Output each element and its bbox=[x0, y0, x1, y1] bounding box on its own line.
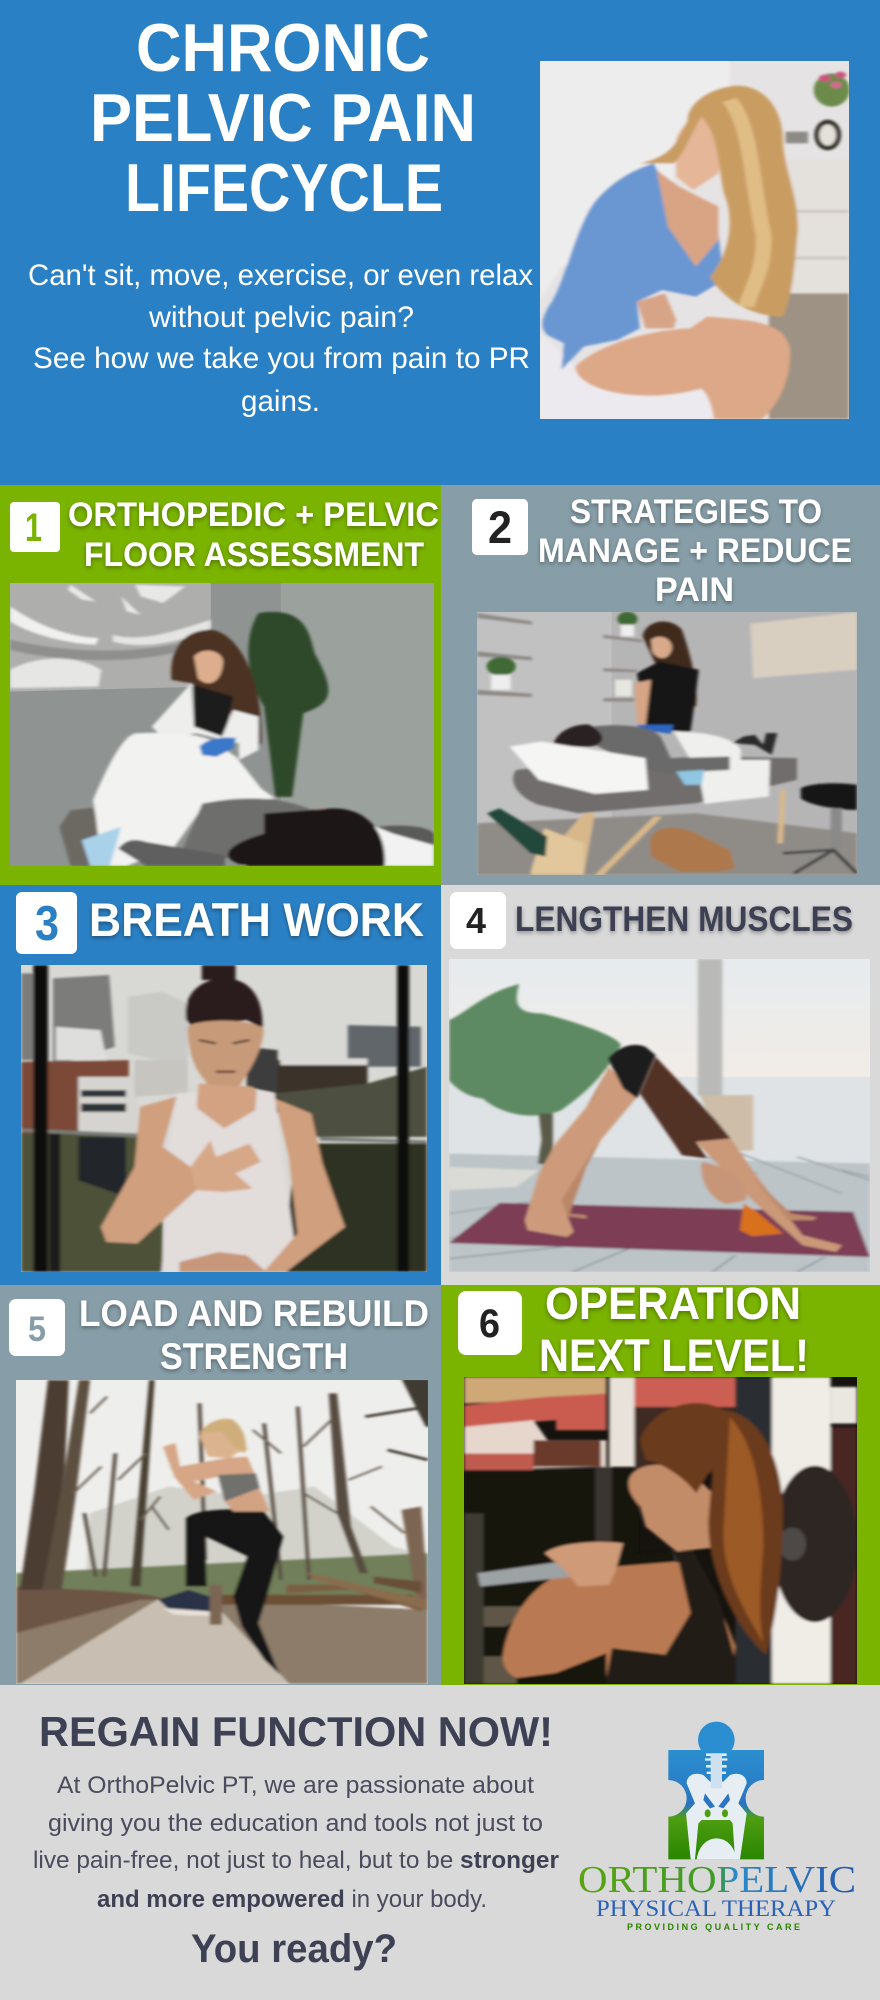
heading 5 bbox=[79, 1293, 429, 1377]
intro text: Can't sit, move, exercise, or even relax bbox=[28, 259, 533, 292]
title: CHRONIC bbox=[136, 10, 430, 86]
heading: regain function: REGAIN FUNCTION NOW! bbox=[39, 1708, 553, 1755]
number badge 3 bbox=[16, 892, 77, 954]
title bbox=[90, 10, 476, 226]
heading 5: STRENGTH bbox=[160, 1336, 348, 1377]
logo: OrthoPelvic Physical Therapy: PROVIDING QUALITY CARE bbox=[627, 1922, 800, 1932]
photo: barbell lift bbox=[464, 1377, 857, 1684]
panel: step 5 bbox=[0, 1285, 441, 1685]
panel: step 3 bbox=[0, 885, 441, 1285]
panel: step 4 bbox=[441, 885, 880, 1285]
body text bbox=[33, 1772, 559, 1913]
intro text: without pelvic pain? bbox=[148, 301, 414, 334]
photo: woman with pelvic pain bbox=[540, 61, 849, 419]
title: LIFECYCLE bbox=[125, 150, 443, 226]
number badge 4: 4 bbox=[466, 900, 486, 941]
heading 4: LENGTHEN MUSCLES bbox=[515, 900, 853, 939]
heading 5: LOAD AND REBUILD bbox=[79, 1293, 429, 1334]
number badge 6: 6 bbox=[479, 1302, 500, 1346]
heading 2: STRATEGIES TO bbox=[570, 493, 822, 531]
number badge 1: 1 bbox=[25, 506, 42, 550]
body text: giving you the education and tools not just to bbox=[48, 1810, 543, 1837]
heading 2: MANAGE + REDUCE bbox=[538, 532, 852, 570]
photo: downward dog stretch bbox=[449, 959, 870, 1272]
number badge 3: 3 bbox=[35, 897, 59, 951]
heading 2 bbox=[538, 493, 852, 609]
number badge 4 bbox=[450, 892, 506, 949]
heading 1: FLOOR ASSESSMENT bbox=[84, 536, 424, 574]
photo: pain management treatment bbox=[477, 612, 857, 875]
body text: At OrthoPelvic PT, we are passionate about bbox=[57, 1772, 534, 1799]
intro text bbox=[28, 259, 533, 418]
number badge 1 bbox=[10, 502, 60, 552]
title: PELVIC PAIN bbox=[90, 80, 476, 156]
number badge 5 bbox=[9, 1299, 65, 1356]
body text: live pain-free, not just to heal, but to be stronger bbox=[33, 1847, 559, 1874]
number badge 5: 5 bbox=[28, 1310, 46, 1349]
intro text: See how we take you from pain to PR bbox=[33, 342, 530, 375]
heading 2: PAIN bbox=[655, 571, 734, 609]
photo: orthopedic assessment bbox=[10, 583, 434, 866]
body text: and more empowered in your body. bbox=[97, 1886, 487, 1913]
heading 3: BREATH WORK bbox=[89, 893, 424, 946]
panel: step 6 bbox=[441, 1278, 880, 1685]
photo: step-up exercise bbox=[16, 1380, 428, 1684]
photo: breath work bbox=[21, 965, 427, 1272]
panel: header bbox=[0, 0, 880, 485]
heading 6: OPERATION bbox=[545, 1278, 801, 1329]
number badge 2 bbox=[472, 499, 528, 555]
intro text: gains. bbox=[241, 385, 320, 418]
heading 1: ORTHOPEDIC + PELVIC bbox=[68, 496, 439, 534]
heading 1 bbox=[68, 496, 439, 574]
heading 6: NEXT LEVEL! bbox=[539, 1330, 809, 1381]
number badge 6 bbox=[458, 1291, 522, 1355]
icon: puzzle piece pelvis bbox=[668, 1722, 764, 1860]
panel: step 1 bbox=[0, 485, 441, 885]
panel: step 2 bbox=[441, 485, 880, 885]
number badge 2: 2 bbox=[488, 502, 512, 553]
call to action: you ready: You ready? bbox=[191, 1927, 397, 1971]
logo: OrthoPelvic Physical Therapy: ORTHOPELVIC bbox=[578, 1859, 856, 1901]
heading 6 bbox=[539, 1278, 809, 1381]
panel: call to action bbox=[0, 1685, 880, 2000]
logo: OrthoPelvic Physical Therapy: PHYSICAL THERAPY bbox=[596, 1896, 836, 1921]
logo: OrthoPelvic Physical Therapy bbox=[578, 1722, 856, 1932]
